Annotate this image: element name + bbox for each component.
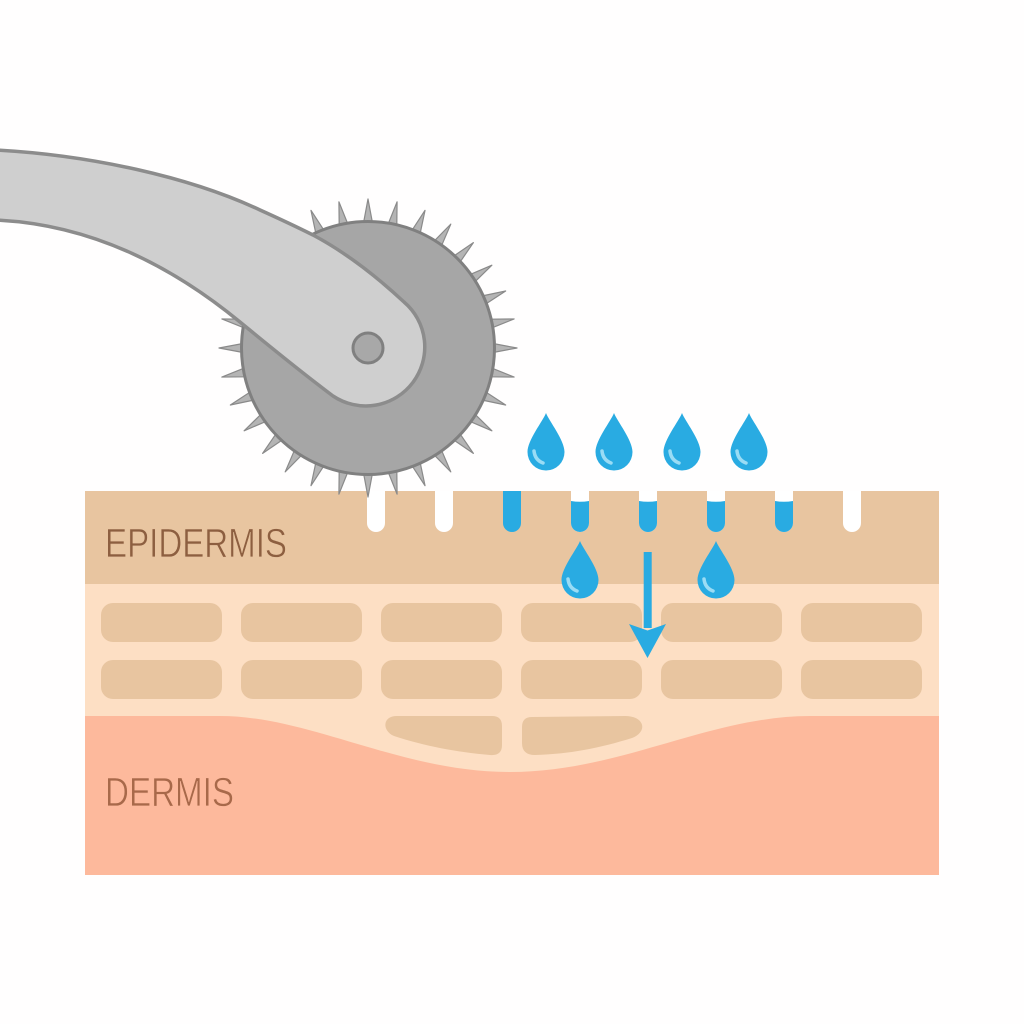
icon: water drop: [596, 413, 632, 470]
icon: water drop inside skin: [562, 541, 598, 598]
roller axle: [353, 333, 383, 363]
icon: water drop: [528, 413, 564, 470]
icon: water drop inside skin: [698, 541, 734, 598]
panel: skin cross-section: [85, 491, 939, 875]
roller handle: [0, 150, 425, 406]
layer: epidermis: [85, 491, 939, 584]
skin cells: [101, 603, 922, 755]
layer: light middle skin layer: [85, 584, 939, 784]
label: epidermis: EPIDERMIS: [105, 520, 287, 566]
micro-channels in the epidermis: [367, 491, 861, 532]
icon: water drop: [664, 413, 700, 470]
icon: derma roller: [0, 150, 517, 497]
icon: water drop: [730, 413, 768, 470]
roller needles: [219, 199, 517, 497]
label: dermis: DERMIS: [105, 769, 234, 815]
layer: dermis: [85, 716, 939, 875]
roller wheel: [242, 222, 494, 474]
arrow: downward penetration: [629, 552, 666, 658]
